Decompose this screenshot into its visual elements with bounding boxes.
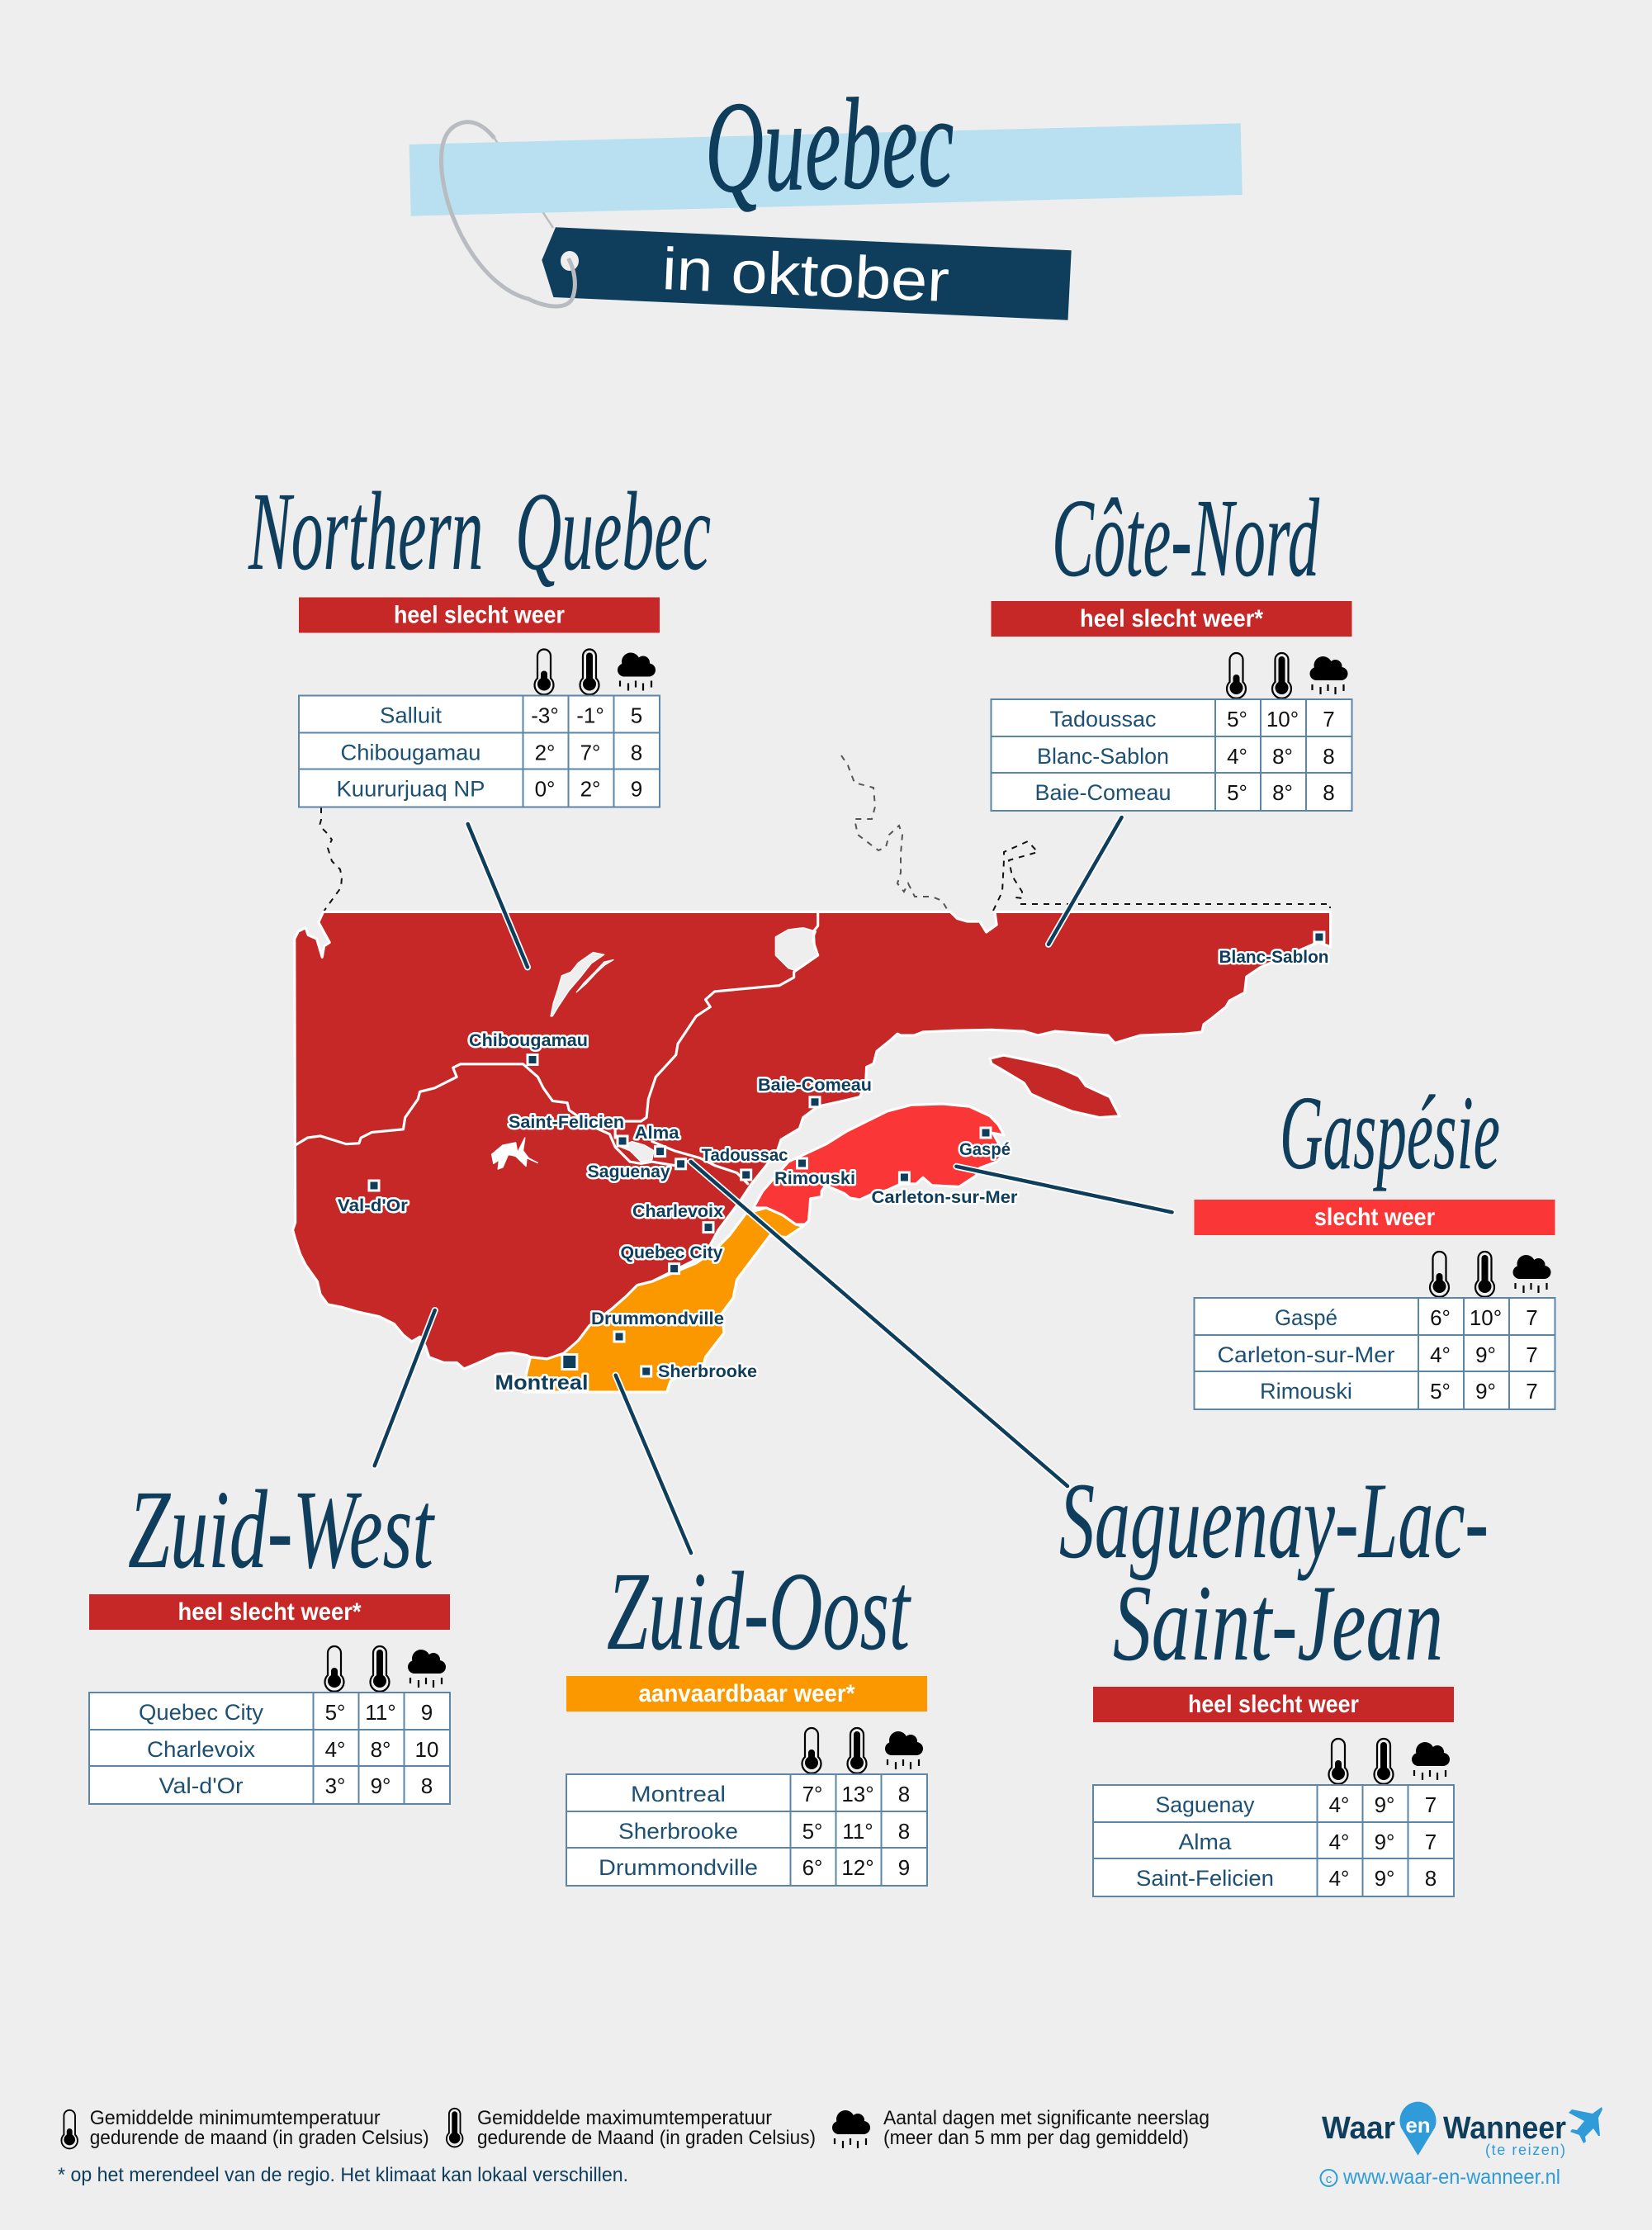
weather table xyxy=(991,699,1352,811)
weather table: 5° xyxy=(802,1819,822,1844)
borders dashed xyxy=(320,755,1330,911)
weather table: 4° xyxy=(1329,1866,1349,1891)
lakes xyxy=(492,928,818,1169)
panel: Gaspesie xyxy=(1194,1200,1555,1409)
weather table: 5° xyxy=(325,1700,345,1725)
heading: Zuid-West: Zuid-West xyxy=(128,1468,435,1592)
city labels: Sherbrooke xyxy=(658,1362,757,1381)
footnote: * op het merendeel van de regio. Het klimaat kan lokaal verschillen. xyxy=(58,2164,628,2186)
weather table: 6° xyxy=(1430,1305,1451,1330)
heading: Cote-Nord: Côte-Nord xyxy=(1052,476,1320,600)
icon: maximum temperature xyxy=(447,2109,462,2147)
weather table: 9° xyxy=(1475,1342,1496,1367)
weather table: 4° xyxy=(1227,744,1247,769)
weather table: Sherbrooke xyxy=(618,1819,738,1844)
panel: Saguenay-Lac-Saint-Jean xyxy=(1093,1687,1454,1896)
weather table: 10° xyxy=(1266,707,1299,731)
weather table: -3° xyxy=(531,703,559,728)
weather table: 9 xyxy=(898,1855,910,1880)
weather table: Tadoussac xyxy=(1050,707,1156,731)
weather table: Salluit xyxy=(380,703,442,728)
weather table: Alma xyxy=(1179,1830,1233,1854)
copyright and website: www.waar-en-wanneer.nl xyxy=(1342,2166,1560,2189)
city labels: Rimouski xyxy=(774,1169,855,1188)
weather table: 8 xyxy=(1425,1866,1437,1891)
weather table: Val-d'Or xyxy=(159,1773,243,1798)
weather table: 9° xyxy=(1375,1830,1394,1854)
city labels: Saint-Felicien xyxy=(509,1113,624,1132)
weather table: 7° xyxy=(802,1782,822,1806)
weather table: 9° xyxy=(1375,1866,1394,1891)
legend text: maximum temperature: gedurende de Maand (in graden Celsius) xyxy=(477,2127,816,2149)
icon: airplane xyxy=(1569,2107,1602,2143)
tag hole xyxy=(561,251,579,271)
status bar: slecht weer xyxy=(1314,1204,1435,1231)
weather table: 7 xyxy=(1425,1792,1437,1817)
logo: Waar en Wanneer xyxy=(1321,2102,1602,2189)
copyright and website: c xyxy=(1326,2172,1332,2186)
weather table: 4° xyxy=(325,1737,345,1762)
weather table: 9° xyxy=(1475,1379,1496,1404)
logo: Waar en Wanneer: Waar xyxy=(1322,2111,1395,2146)
title band xyxy=(409,123,1243,216)
status bar xyxy=(991,601,1352,637)
city labels: Charlevoix xyxy=(632,1202,723,1221)
weather table: 8 xyxy=(898,1782,910,1806)
map of Quebec xyxy=(293,755,1331,1553)
weather table: Montreal xyxy=(631,1782,726,1806)
legend text: maximum temperature xyxy=(477,2107,816,2149)
status bar: heel slecht weer* xyxy=(1080,605,1263,632)
weather table: 10 xyxy=(415,1737,438,1762)
city labels: Carleton-sur-Mer xyxy=(872,1188,1017,1207)
weather table xyxy=(566,1774,927,1886)
weather table: 8 xyxy=(1323,744,1335,769)
weather table: 11° xyxy=(365,1700,396,1725)
weather table: 4° xyxy=(1329,1792,1349,1817)
status bar: heel slecht weer* xyxy=(178,1598,362,1626)
city labels: Saguenay xyxy=(588,1162,670,1181)
panel: Zuid-Oost xyxy=(566,1676,927,1886)
weather table: 4° xyxy=(1329,1830,1349,1854)
status bar xyxy=(566,1676,927,1712)
island: Anticosti xyxy=(990,1055,1119,1118)
weather table: 5° xyxy=(1430,1379,1451,1404)
weather table: Rimouski xyxy=(1260,1379,1352,1404)
legend text: minimum temperature: Gemiddelde minimumtemperatuur xyxy=(90,2107,381,2129)
weather table: 5° xyxy=(1227,707,1247,731)
weather table: Saguenay xyxy=(1156,1792,1255,1817)
title block xyxy=(409,69,1243,320)
city labels: Quebec City xyxy=(621,1243,723,1262)
tag string xyxy=(441,122,575,306)
region boundaries xyxy=(296,911,818,1184)
weather table: Baie-Comeau xyxy=(1035,780,1171,805)
panel: Zuid-West xyxy=(89,1594,450,1804)
status bar: heel slecht weer xyxy=(394,601,565,629)
heading: Zuid-Oost: Zuid-Oost xyxy=(607,1550,911,1674)
region: Gaspesie xyxy=(754,1104,1004,1224)
weather table: Carleton-sur-Mer xyxy=(1217,1342,1395,1367)
city labels: Blanc-Sablon xyxy=(1219,948,1329,967)
table icons xyxy=(1227,653,1347,698)
city labels xyxy=(338,948,1329,1394)
weather table: 7 xyxy=(1526,1379,1538,1404)
legend text: maximum temperature: Gemiddelde maximumtemperatuur xyxy=(477,2107,772,2129)
heading: Northern Quebec: Northern Quebec xyxy=(248,470,711,594)
panel: Cote-Nord xyxy=(991,601,1352,811)
logo: Waar en Wanneer: Wanneer xyxy=(1443,2111,1566,2146)
city labels: Drummondville xyxy=(591,1309,724,1328)
city labels: Tadoussac xyxy=(702,1146,788,1165)
status bar xyxy=(1194,1200,1555,1235)
weather table: 11° xyxy=(842,1819,873,1844)
weather table: 2° xyxy=(535,740,555,765)
weather table: Blanc-Sablon xyxy=(1037,744,1169,769)
city labels: Alma xyxy=(635,1124,679,1143)
tag xyxy=(542,227,1072,320)
legend text: minimum temperature: gedurende de maand (in graden Celsius) xyxy=(90,2127,429,2149)
weather table: 9 xyxy=(631,776,642,801)
status bar xyxy=(299,598,660,632)
weather table: 7 xyxy=(1526,1342,1538,1367)
weather table xyxy=(299,695,660,807)
weather table: 7 xyxy=(1425,1830,1437,1854)
table icons xyxy=(325,1646,446,1692)
weather table: 5 xyxy=(631,703,642,728)
weather table: 0° xyxy=(535,776,555,801)
weather table: 3° xyxy=(325,1773,345,1798)
weather table xyxy=(1194,1298,1555,1409)
tag string back strand xyxy=(494,137,553,228)
weather table: 8 xyxy=(421,1773,433,1798)
weather table: 8 xyxy=(898,1819,910,1844)
weather table: 10° xyxy=(1470,1305,1502,1330)
weather table: 4° xyxy=(1430,1342,1451,1367)
icon: minimum temperature xyxy=(61,2110,78,2148)
table icons xyxy=(1329,1739,1450,1784)
city labels: Baie-Comeau xyxy=(758,1076,872,1095)
weather table: Quebec City xyxy=(139,1700,263,1725)
subtitle: in oktober xyxy=(660,236,950,315)
legend text: precipitation xyxy=(883,2107,1209,2149)
leader lines xyxy=(375,817,1172,1553)
weather table: 9 xyxy=(421,1700,433,1725)
legend text: precipitation: Aantal dagen met significante neerslag xyxy=(883,2107,1209,2129)
weather table: 9° xyxy=(371,1773,391,1798)
weather table: 7 xyxy=(1526,1305,1538,1330)
weather table: 12° xyxy=(841,1855,874,1880)
icon: precipitation xyxy=(832,2110,870,2148)
weather table: 8° xyxy=(1272,744,1293,769)
panel: Northern Quebec xyxy=(299,598,660,807)
weather table: 7 xyxy=(1323,707,1335,731)
city labels: Montreal xyxy=(495,1371,588,1394)
legend text: precipitation: (meer dan 5 mm per dag gemiddeld) xyxy=(883,2127,1189,2149)
city labels: Gaspé xyxy=(959,1140,1011,1159)
weather table: -1° xyxy=(576,703,604,728)
weather table: 9° xyxy=(1375,1792,1394,1817)
weather table: Gaspé xyxy=(1275,1305,1337,1330)
weather table: Charlevoix xyxy=(147,1737,256,1762)
weather table xyxy=(89,1693,450,1804)
weather table: 8 xyxy=(631,740,642,765)
city markers xyxy=(369,932,1324,1376)
status bar xyxy=(89,1594,450,1630)
weather table xyxy=(1093,1785,1454,1896)
icon: map pin: en xyxy=(1405,2113,1431,2138)
weather table: 8 xyxy=(1323,780,1335,805)
table icons xyxy=(1430,1252,1550,1297)
status bar: heel slecht weer xyxy=(1188,1691,1359,1718)
weather table: Chibougamau xyxy=(340,740,480,765)
status bar xyxy=(1093,1687,1454,1722)
status bar: aanvaardbaar weer* xyxy=(639,1680,855,1707)
weather table: 8° xyxy=(1272,780,1293,805)
heading: Saguenay-Lac-Saint-Jean: Saint-Jean xyxy=(1113,1562,1443,1683)
region: Northern Quebec and Zuid-West and Saguenay and Cote-Nord xyxy=(293,911,1331,1369)
table icons xyxy=(535,649,656,694)
weather table: 13° xyxy=(841,1782,874,1806)
legend text: minimum temperature xyxy=(90,2107,429,2149)
legend xyxy=(58,2107,1209,2186)
weather table: 8° xyxy=(371,1737,391,1762)
title: Quebec: Quebec xyxy=(703,69,956,220)
logo: Waar en Wanneer: (te reizen) xyxy=(1485,2142,1565,2158)
weather table: 7° xyxy=(580,740,600,765)
city labels: Chibougamau xyxy=(469,1031,588,1050)
icon: map pin xyxy=(1400,2102,1437,2156)
weather table: 5° xyxy=(1227,780,1247,805)
city labels: Val-d'Or xyxy=(338,1196,408,1215)
weather table: 6° xyxy=(802,1855,822,1880)
table icons xyxy=(802,1728,923,1773)
weather table: Kuururjuaq NP xyxy=(337,776,485,801)
weather table: Saint-Felicien xyxy=(1136,1866,1274,1891)
weather table: Drummondville xyxy=(599,1855,758,1880)
heading: Saguenay-Lac-Saint-Jean xyxy=(1059,1460,1489,1683)
region: Zuid-Oost xyxy=(523,1208,803,1392)
weather table: 2° xyxy=(580,776,600,801)
